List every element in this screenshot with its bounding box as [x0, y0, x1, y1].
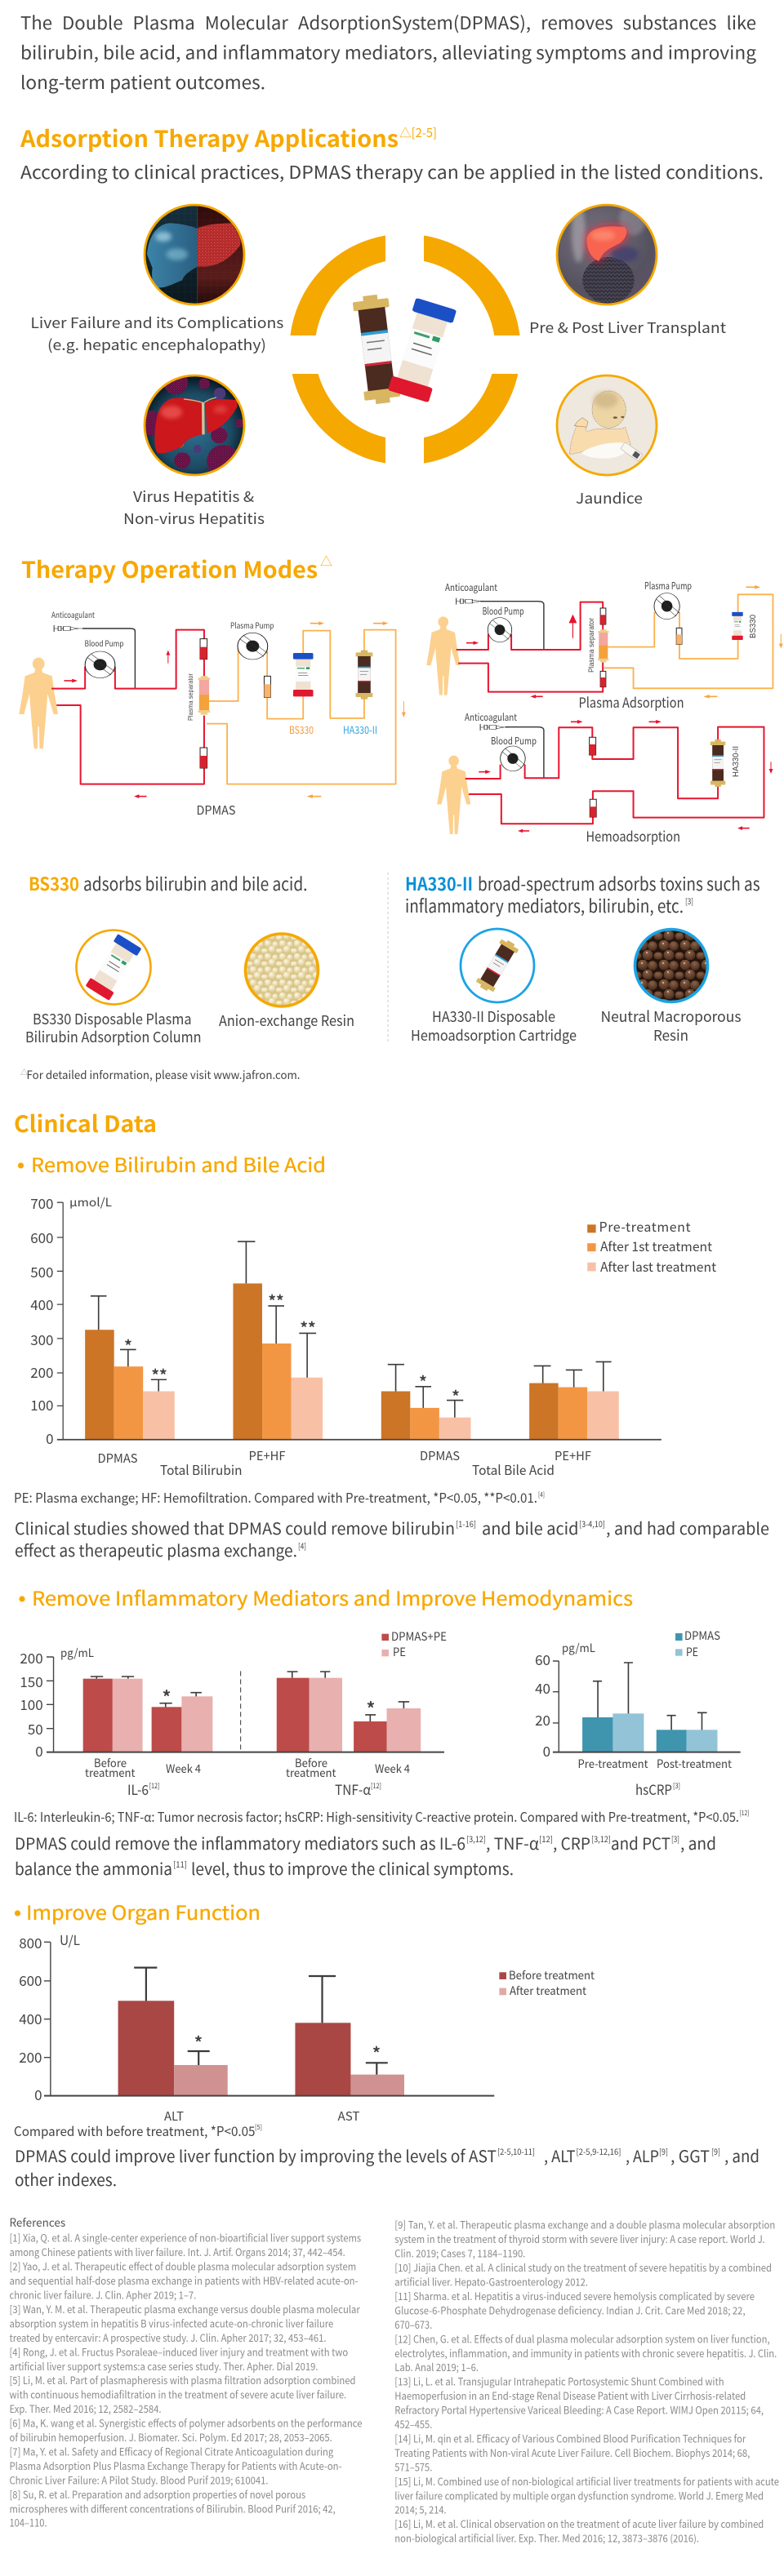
- bar chart: IL-6 and TNF-alpha: Week 4: [375, 1761, 410, 1777]
- condition labels: Pre & Post Liver Transplant: [529, 317, 726, 338]
- references: Chronic Liver Failure: A Pilot Study. Blood Purif 2019; 610041.: [10, 2472, 268, 2487]
- bar chart: bilirubin and bile acid: 500: [30, 1261, 54, 1281]
- body text: inflammatory mediators: [3,12]: [591, 1832, 611, 1845]
- body text: inflammatory mediators: [3]: [671, 1832, 679, 1845]
- bar chart: IL-6 and TNF-alpha: DPMAS+PE: [391, 1628, 447, 1645]
- references: [11] Sharma. et al. Hepatitis a virus-induced severe hemolysis complicated by severe: [394, 2288, 755, 2303]
- references: [14] Li, M. qin et al. Efficacy of Various Combined Blood Purification Techniques for: [394, 2431, 746, 2445]
- bar chart: IL-6 and TNF-alpha: 50: [28, 1718, 43, 1739]
- diagram: DPMAS circuit: DPMAS: [196, 802, 236, 819]
- bar chart: ALT and AST: 600: [19, 1970, 42, 1990]
- bar chart: bilirubin and bile acid: **: [268, 1290, 284, 1312]
- intro paragraph: [20, 9, 757, 95]
- diagram: hemoadsorption circuit: Blood Pump: [491, 734, 537, 748]
- body text: organ function: [2-5,10-11]: [497, 2145, 535, 2157]
- bar chart: hsCRP: 20: [535, 1709, 550, 1730]
- bar chart: bilirubin and bile acid: [30, 1193, 716, 1479]
- body text: inflammatory mediators: , and: [680, 1831, 716, 1854]
- body text: inflammatory mediators: and PCT: [611, 1831, 670, 1854]
- HA330-II labels: Hemoadsorption Cartridge: [411, 1024, 577, 1046]
- references: [5] Li, M. et al. Part of plasmapheresis with plasma filtration adsorption combined: [10, 2372, 356, 2387]
- body text: organ function: , and: [724, 2143, 760, 2167]
- panel: BS330: [25, 870, 354, 1047]
- references: [10, 2214, 779, 2546]
- diagram: hemoadsorption circuit: HA330-II: [731, 746, 741, 777]
- bar chart: ALT and AST: *: [194, 2030, 203, 2054]
- references: 104–110.: [10, 2515, 47, 2530]
- HA330-II description: inflammatory mediators, bilirubin, etc.: [405, 892, 684, 918]
- bar chart: bilirubin and bile acid: μmol/L: [69, 1194, 112, 1210]
- bar chart: bilirubin and bile acid: PE+HF: [248, 1447, 286, 1464]
- diagram: DPMAS circuit: BS330: [289, 722, 314, 737]
- bar chart: ALT and AST: AST: [338, 2107, 360, 2125]
- bar chart: IL-6 and TNF-alpha: Before: [295, 1755, 327, 1771]
- body text: organ function: , GGT: [670, 2143, 710, 2167]
- body text: bilirubin findings: effect as therapeutic plasma exchange.: [15, 1538, 297, 1561]
- references: [7] Ma, Y. et al. Safety and Efficacy of Regional Citrate Anticoagulation during: [10, 2444, 333, 2458]
- HA330-II labels: [411, 1006, 742, 1046]
- references: treated by entercavir: A prospective study. J. Clin. Apher 2017; 32, 453–461.: [10, 2330, 327, 2345]
- bar chart: bilirubin and bile acid: 400: [30, 1294, 54, 1314]
- diagram: plasma adsorption circuit: Anticoagulant: [445, 580, 497, 594]
- heading: therapy operation modes: △: [320, 553, 332, 570]
- heading: adsorption therapy applications: Adsorption Therapy Applications: [20, 122, 399, 154]
- bar chart: IL-6 and TNF-alpha: 100: [20, 1694, 43, 1714]
- bar chart: hsCRP: [535, 1628, 741, 1799]
- bar chart: ALT and AST: [19, 1930, 595, 2125]
- bar chart: bilirubin and bile acid: Pre-treatment: [599, 1216, 691, 1236]
- bar chart: hsCRP: 40: [535, 1677, 550, 1698]
- bar chart: IL-6 and TNF-alpha: *: [367, 1696, 375, 1721]
- references: of bilirubin hemoperfusion. J. Biomater. Sci. Polym. Ed 2017; 28, 2053–2065.: [10, 2429, 332, 2445]
- diagram: DPMAS circuit: Plasma Pump: [230, 619, 274, 631]
- references: absorption system in hepatitis B virus-infected acute-on-chronic liver failure: [10, 2315, 333, 2330]
- footnote: For detailed information, please visit www.jafron.com.: [26, 1067, 301, 1083]
- references: [6] Ma, K. wang et al. Synergistic effects of polymer adsorbents on the performance: [10, 2415, 363, 2431]
- body text: bilirubin findings: and bile acid: [482, 1516, 578, 1539]
- references: Haemoperfusion in an End-stage Renal Disease Patient with Liver Cirrhosis-related: [394, 2387, 746, 2403]
- diagram: plasma adsorption circuit: [426, 579, 783, 712]
- intro paragraph: long-term patient outcomes.: [20, 69, 265, 95]
- diagram: DPMAS circuit: [19, 608, 406, 819]
- bar chart: hsCRP: PE: [686, 1644, 698, 1660]
- body text: organ function: [15, 2143, 760, 2191]
- bar chart: hsCRP: DPMAS: [684, 1628, 720, 1644]
- BS330 labels: [25, 1008, 354, 1047]
- bar chart: bilirubin and bile acid: Total Bilirubin: [160, 1459, 242, 1479]
- diagram: plasma adsorption circuit: Plasma Adsorption: [578, 691, 684, 712]
- body text: organ function: DPMAS could improve liver function by improving the levels of AST: [15, 2143, 497, 2167]
- bar chart: IL-6 and TNF-alpha: Before: [94, 1755, 127, 1771]
- body text: inflammatory mediators: , CRP: [553, 1831, 590, 1854]
- references: artificial liver support systems:a case series study. Ther. Apher. Dial 2019.: [10, 2358, 318, 2374]
- body text: organ function: , ALT: [544, 2143, 576, 2167]
- references: with continuous hemodiafiltration in the treatment of severe acute liver failure.: [10, 2387, 346, 2402]
- bar chart: IL-6 and TNF-alpha: 0: [35, 1740, 43, 1761]
- references: Exp. Ther. Med 2016; 12, 2582–2584.: [10, 2401, 162, 2416]
- chart note: bilirubin: [4]: [538, 1490, 545, 1499]
- HA330-II description: [3]: [685, 895, 693, 907]
- bar chart: ALT and AST: 800: [19, 1932, 42, 1952]
- references: 571–575.: [394, 2458, 432, 2474]
- diagram: plasma adsorption circuit: Plasma Pump: [644, 579, 692, 593]
- condition labels: [30, 312, 726, 529]
- bar chart: IL-6 and TNF-alpha: *: [163, 1685, 171, 1709]
- body text: bilirubin findings: Clinical studies showed that DPMAS could remove bilirubin: [15, 1516, 455, 1539]
- body text: organ function: [9]: [659, 2145, 668, 2157]
- heading: clinical data: Clinical Data: [14, 1107, 157, 1139]
- bar chart: ALT and AST: U/L: [60, 1930, 80, 1949]
- bar chart: hsCRP: 60: [535, 1649, 550, 1669]
- references: artificial liver. Hepato-Gastroenterology 2012.: [394, 2274, 588, 2289]
- references: Clin. 2019; Cases 7, 1184–1190.: [394, 2245, 525, 2261]
- diagram: hemoadsorption circuit: [437, 710, 773, 846]
- footnote: △: [20, 1067, 28, 1077]
- diagram: DPMAS circuit: Blood Pump: [85, 637, 124, 649]
- body text: bilirubin findings: , and had comparable: [606, 1516, 769, 1539]
- references: among Chinese patients with liver failure. Int. J. Artif. Organs 2014; 37, 442–454.: [10, 2244, 345, 2259]
- bar chart: bilirubin and bile acid: **: [300, 1317, 316, 1339]
- bar chart: hsCRP: [3]: [673, 1780, 680, 1791]
- icon: anion-exchange resin: [244, 933, 319, 1008]
- references: non-biological artificial liver. Exp. Ther. Med 2016; 12, 3873–3876 (2016).: [394, 2530, 699, 2546]
- bar chart: bilirubin and bile acid: PE+HF: [555, 1447, 591, 1464]
- bar chart: IL-6 and TNF-alpha: 200: [20, 1647, 43, 1668]
- bar chart: IL-6 and TNF-alpha: TNF-α: [335, 1779, 371, 1799]
- bar chart: bilirubin and bile acid: **: [151, 1364, 167, 1386]
- body text: bilirubin findings: [15, 1516, 769, 1561]
- references: [4] Rong, J. et al. Fructus Psoraleae–induced liver injury and treatment with two: [10, 2343, 348, 2359]
- bar chart: ALT and AST: *: [372, 2041, 381, 2064]
- subheading: remove inflammatory mediators: Remove Inflammatory Mediators and Improve Hemodynamics: [32, 1583, 633, 1611]
- bar chart: ALT and AST: After treatment: [510, 1983, 587, 1999]
- bar chart: IL-6 and TNF-alpha: [12]: [149, 1780, 160, 1791]
- chart note: inflammatory mediators: IL-6: Interleukin-6; TNF-α: Tumor necrosis factor; hsCRP: High-sensitivity C-reactive protein. Compared with Pre-treatment, *P<0.05.: [14, 1806, 739, 1826]
- references: Lab. Anal 2019; 1–6.: [394, 2359, 479, 2374]
- intro paragraph: The Double Plasma Molecular AdsorptionSystem(DPMAS), removes substances like: [20, 9, 756, 35]
- references: microspheres with different concentrations of Bilirubin. Blood Purif 2016; 42,: [10, 2500, 336, 2516]
- HA330-II labels: HA330-II Disposable: [432, 1006, 555, 1027]
- bar chart: bilirubin and bile acid: 700: [30, 1193, 54, 1213]
- references: 452–455.: [394, 2416, 432, 2432]
- body text: inflammatory mediators: [15, 1831, 716, 1880]
- body text: inflammatory mediators: [11]: [173, 1858, 187, 1870]
- bar chart: bilirubin and bile acid: After 1st treatment: [600, 1236, 712, 1255]
- HA330-II description: HA330-II: [405, 870, 473, 896]
- chart note: organ function: Compared with before treatment, *P<0.05: [14, 2121, 256, 2140]
- HA330-II labels: Neutral Macroporous: [601, 1006, 742, 1027]
- bar chart: bilirubin and bile acid: 300: [30, 1329, 54, 1349]
- product image: two cartridges: [352, 293, 457, 406]
- references: chronic liver failure. J. Clin. Apher 2019; 1–7.: [10, 2287, 196, 2302]
- bar chart: bilirubin and bile acid: *: [419, 1370, 427, 1392]
- bar chart: IL-6 and TNF-alpha: [20, 1628, 447, 1799]
- bar chart: hsCRP: Post-treatment: [657, 1756, 733, 1772]
- bar chart: IL-6 and TNF-alpha: PE: [393, 1644, 406, 1660]
- bar chart: IL-6 and TNF-alpha: Week 4: [166, 1761, 201, 1777]
- body text: organ function: [2-5,9-12,16]: [577, 2145, 621, 2157]
- bar chart: bilirubin and bile acid: *: [124, 1335, 132, 1357]
- references: and sequential half-dose plasma exchange in patients with HBV-related acute-on-: [10, 2272, 358, 2288]
- bar chart: bilirubin and bile acid: DPMAS: [420, 1447, 460, 1464]
- bar chart: bilirubin and bile acid: After last treatment: [600, 1256, 716, 1276]
- references: [2] Yao, J. et al. Therapeutic effect of double plasma molecular adsorption system: [10, 2258, 356, 2274]
- HA330-II description: [405, 870, 760, 918]
- bar chart: IL-6 and TNF-alpha: pg/mL: [60, 1645, 94, 1661]
- bar chart: hsCRP: Pre-treatment: [578, 1756, 648, 1772]
- body text: inflammatory mediators: balance the ammonia: [15, 1856, 172, 1880]
- icon: HA330-II cartridge: [461, 929, 534, 1002]
- diagram: DPMAS circuit: Anticoagulant: [51, 608, 95, 620]
- condition labels: Non-virus Hepatitis: [123, 508, 265, 529]
- bar chart: bilirubin and bile acid: Total Bile Acid: [472, 1459, 555, 1479]
- BS330 labels: Anion-exchange Resin: [219, 1010, 354, 1031]
- bar chart: IL-6 and TNF-alpha: IL-6: [127, 1779, 149, 1799]
- body text: bilirubin findings: [4]: [298, 1539, 306, 1552]
- bar chart: bilirubin and bile acid: 200: [30, 1361, 54, 1382]
- body text: inflammatory mediators: level, thus to improve the clinical symptoms.: [191, 1856, 514, 1880]
- references: [13] Li, L. et al. Transjugular Intrahepatic Portosystemic Shunt Combined with: [394, 2374, 724, 2389]
- bar chart: ALT and AST: 0: [34, 2084, 42, 2104]
- diagram: plasma adsorption circuit: BS330: [748, 615, 758, 638]
- references: Glucose-6-Phosphate Dehydrogenase deficiency. Indian J. Crit. Care Med 2018; 22,: [394, 2302, 746, 2317]
- references: 670–673.: [394, 2316, 432, 2332]
- bar chart: bilirubin and bile acid: DPMAS: [98, 1450, 138, 1467]
- icon: jaundice baby: [555, 374, 658, 477]
- diagram: plasma adsorption circuit: Blood Pump: [483, 604, 524, 618]
- diagram: hemoadsorption circuit: Anticoagulant: [465, 710, 517, 724]
- icon: virus hepatitis: [139, 370, 246, 477]
- BS330 description: BS330: [29, 870, 79, 896]
- subheading: remove bilirubin and bile acid: Remove Bilirubin and Bile Acid: [31, 1149, 326, 1178]
- references: [8] Su, R. et al. Preparation and adsorption properties of novel porous: [10, 2486, 305, 2502]
- body text: bilirubin findings: [3-4,10]: [579, 1517, 605, 1530]
- body text: organ function: [9]: [711, 2145, 720, 2157]
- subheading: improve organ function: Improve Organ Function: [26, 1897, 261, 1925]
- heading: therapy operation modes: Therapy Operation Modes: [21, 553, 318, 585]
- heading: adsorption therapy applications: △[2-5]: [399, 124, 437, 141]
- body text: bilirubin findings: [1-16]: [456, 1517, 476, 1530]
- references: [1] Xia, Q. et al. A single-center experience of non-bioartificial liver support systems: [10, 2230, 361, 2245]
- references: 2014; 5, 214.: [394, 2502, 447, 2517]
- bar chart: bilirubin and bile acid: *: [452, 1385, 460, 1407]
- bar chart: ALT and AST: ALT: [164, 2107, 184, 2125]
- bar chart: bilirubin and bile acid: 600: [30, 1227, 54, 1247]
- condition labels: Virus Hepatitis &: [133, 486, 254, 507]
- BS330 labels: BS330 Disposable Plasma: [33, 1008, 192, 1029]
- HA330-II labels: Resin: [653, 1024, 688, 1046]
- diagram: DPMAS circuit: HA330-II: [343, 722, 377, 737]
- icon: BS330 column: [77, 930, 150, 1004]
- intro paragraph: bilirubin, bile acid, and inflammatory mediators, alleviating symptoms and improving: [20, 39, 757, 65]
- orange ring: [278, 227, 532, 472]
- chart note: inflammatory mediators: [12]: [740, 1809, 750, 1818]
- references: [3] Wan, Y. M. et al. Therapeutic plasma exchange versus double plasma molecular: [10, 2301, 360, 2316]
- BS330 description: adsorbs bilirubin and bile acid.: [83, 870, 307, 896]
- bar chart: ALT and AST: Before treatment: [509, 1967, 595, 1983]
- references: Plasma Adsorption Plus Plasma Exchange Therapy for Patients with Acute-on-: [10, 2458, 341, 2473]
- bar chart: ALT and AST: 200: [19, 2046, 42, 2067]
- bar chart: IL-6 and TNF-alpha: [12]: [371, 1780, 381, 1791]
- bar chart: ALT and AST: 400: [19, 2008, 42, 2028]
- body text: inflammatory mediators: [3,12]: [466, 1832, 486, 1845]
- bar chart: IL-6 and TNF-alpha: treatment: [85, 1765, 136, 1781]
- bar chart: IL-6 and TNF-alpha: treatment: [286, 1765, 336, 1781]
- applications intro text: According to clinical practices, DPMAS therapy can be applied in the listed conditions.: [20, 158, 764, 184]
- BS330 labels: Bilirubin Adsorption Column: [25, 1026, 202, 1047]
- body text: inflammatory mediators: , TNF-α: [486, 1831, 539, 1854]
- body text: inflammatory mediators: [12]: [539, 1832, 553, 1845]
- icon: neutral macroporous resin: [634, 928, 709, 1003]
- bar chart: hsCRP: hsCRP: [635, 1779, 672, 1799]
- references: Treating Patients with Non-viral Acute Liver Failure. Cell Biochem. Biophys 2014; 68,: [394, 2445, 750, 2460]
- chart note: bilirubin: PE: Plasma exchange; HF: Hemofiltration. Compared with Pre-treatment, *P<0.05, **P<0.01.: [14, 1487, 537, 1507]
- body text: organ function: other indexes.: [15, 2167, 117, 2191]
- condition labels: Liver Failure and its Complications: [30, 312, 283, 333]
- diagram: plasma adsorption circuit: Plasma separator: [587, 618, 595, 673]
- bar chart: IL-6 and TNF-alpha: 150: [20, 1671, 43, 1691]
- diagram: DPMAS circuit: Plasma separator: [187, 673, 194, 721]
- condition labels: Jaundice: [576, 487, 643, 509]
- body text: inflammatory mediators: DPMAS could remove the inflammatory mediators such as IL-6: [15, 1831, 466, 1854]
- bar chart: bilirubin and bile acid: 100: [30, 1394, 54, 1415]
- panel: HA330-II: [405, 870, 760, 1046]
- chart note: organ function: [5]: [255, 2123, 262, 2132]
- bar chart: hsCRP: pg/mL: [562, 1640, 595, 1656]
- condition labels: (e.g. hepatic encephalopathy): [47, 334, 266, 355]
- references: References: [10, 2214, 66, 2231]
- body text: organ function: , ALP: [626, 2143, 659, 2167]
- bar chart: hsCRP: 0: [543, 1740, 550, 1761]
- icon: liver transplant: [555, 204, 658, 305]
- bar chart: bilirubin and bile acid: 0: [46, 1428, 54, 1448]
- icon: liver failure: [144, 204, 245, 305]
- diagram: hemoadsorption circuit: Hemoadsorption: [586, 825, 680, 846]
